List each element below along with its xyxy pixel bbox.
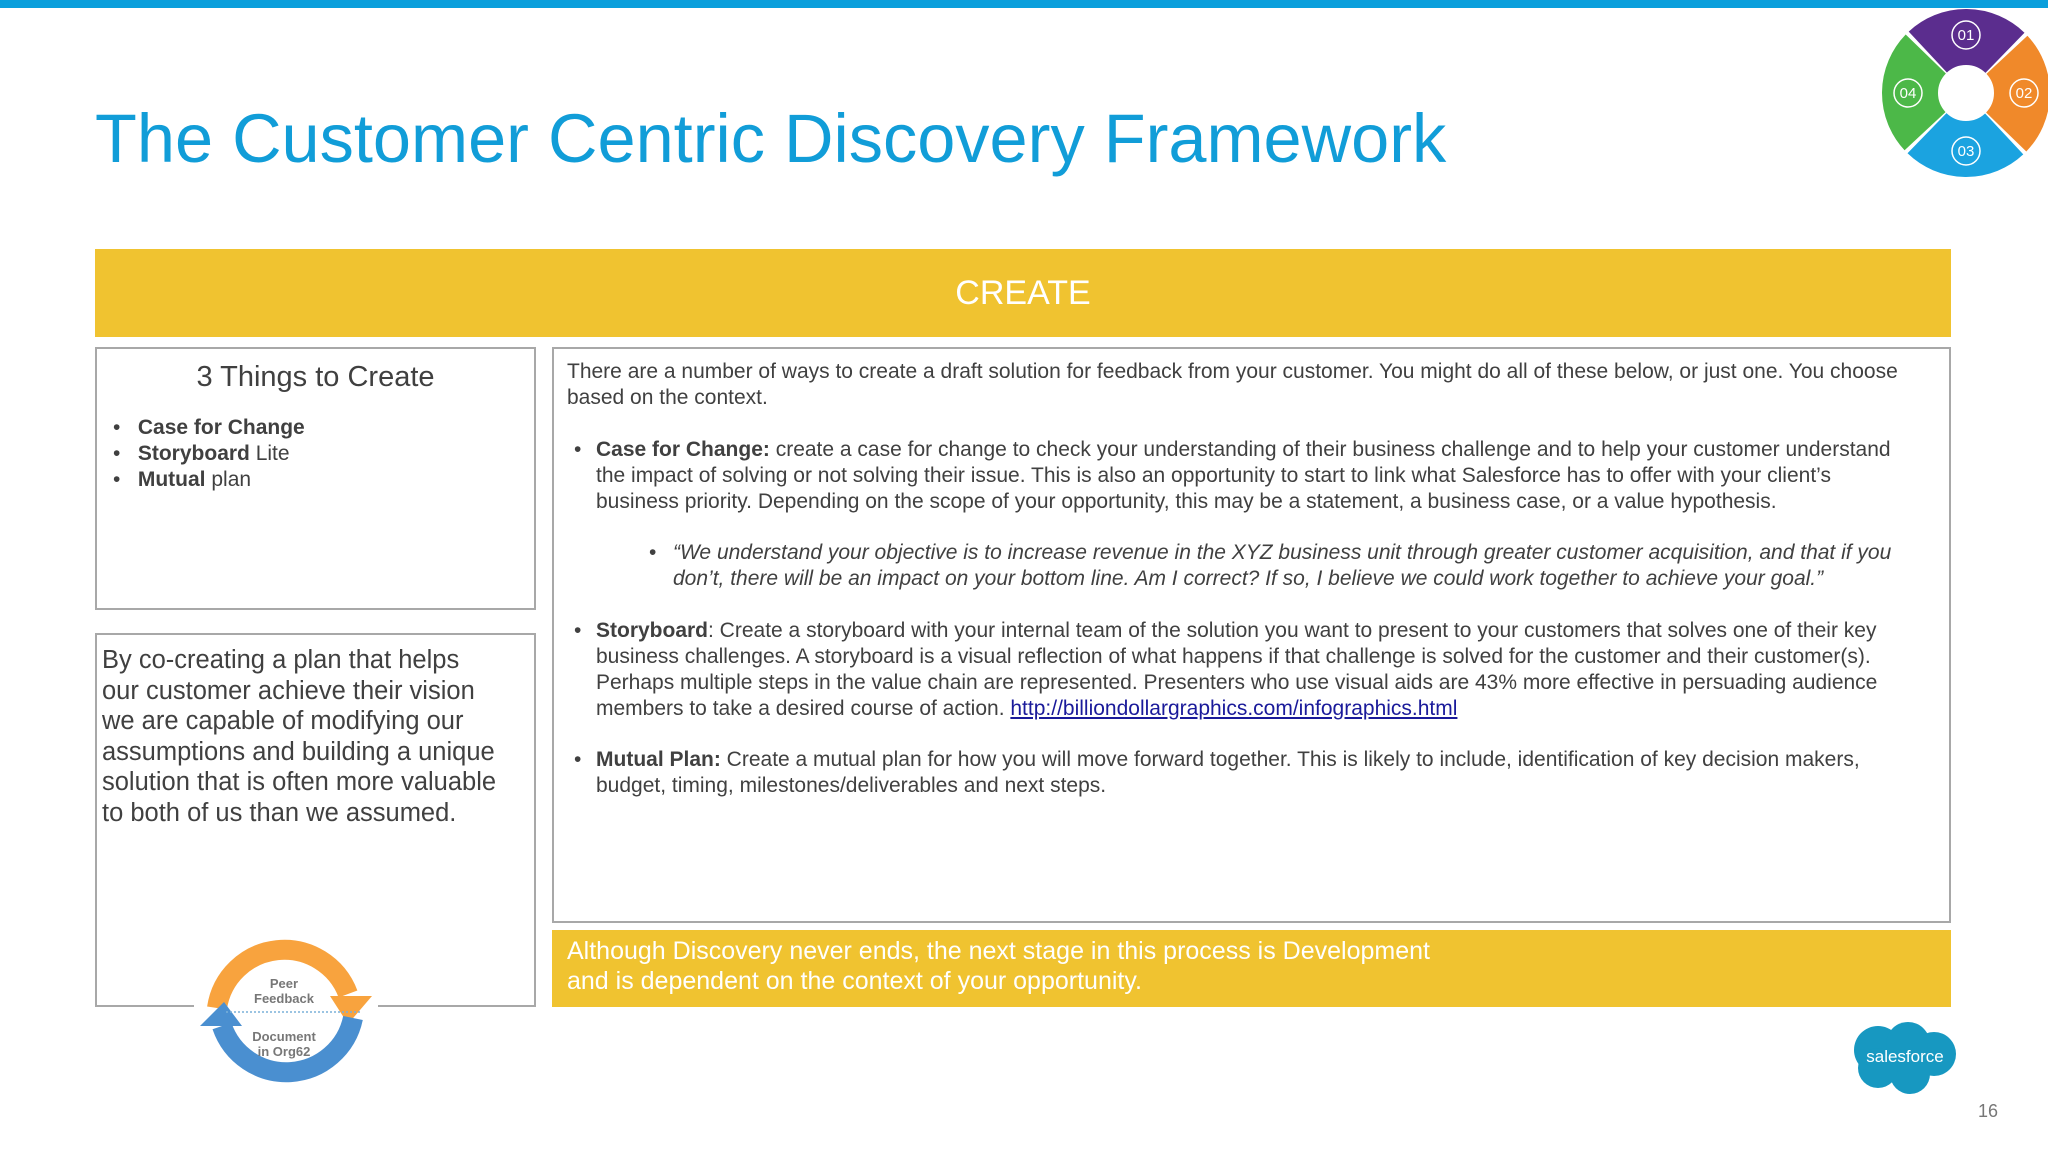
heading: 3 Things to Create [196,361,435,393]
CREATE banner: CREATE [955,274,1091,312]
logo: four-step cycle: 04 [1900,85,1916,102]
mutual plan: Mutual Plan: Create a mutual plan for how you will move forward together. This is likely to include, identification of key decision makers, budget, timing, milestones/deliverables and next steps. [596,748,1860,797]
quote: “We understand your objective is to increase revenue in the XYZ business unit through greater customer acquisition, and that if you don’t, there will be an impact on your bottom line. Am I correct? If so, I believe we could work together to achieve your goal.” [673,541,1891,590]
icon: peer feedback cycle: Peer [270,976,298,991]
top bar [0,0,2048,8]
icon: peer feedback cycle: Feedback [254,991,315,1006]
panel: co-creating statement: By co-creating a plan that helps our customer achieve their vision we are capable of modifying our assumptions and building a unique solution that is often more valuable to both of us than we assumed. [102,646,496,826]
bullet list [113,416,305,491]
logo: four-step cycle: 02 [2016,85,2032,102]
callout: next stage: Although Discovery never ends, the next stage in this process is Development [567,937,1430,965]
title: The Customer Centric Discovery Framework [95,100,1446,177]
bullet list: • Case for Change [113,416,305,439]
logo: four-step cycle: 03 [1958,143,1974,160]
logo: four-step cycle [1882,9,2048,177]
panel: ways to create draft solution [552,347,1951,923]
icon: peer feedback cycle [194,940,378,1082]
icon: peer feedback cycle: in Org62 [258,1044,310,1059]
bullet list: • Mutual plan [113,468,251,491]
intro text: There are a number of ways to create a draft solution for feedback from your customer. You might do all of these below, or just one. You choose based on the context. [567,360,1898,409]
storyboard: Storyboard: Create a storyboard with your internal team of the solution you want to present to your customers that solves one of their key business challenges. A storyboard is a visual reflection of what happens if that challenge is solved for the customer and their customer(s). Perhaps multiple steps in the value chain are represented. Presenters who use visual aids are 43% more effective in persuading audience members to take a desired course of action. http://billiondollargraphics.com/infographics.html [596,618,1877,720]
icon: salesforce cloud: salesforce [1866,1047,1944,1066]
icon: peer feedback cycle: Document [252,1029,316,1044]
page number: 16 [1978,1101,1998,1121]
CREATE banner [95,249,1951,337]
bullet list: • Storyboard Lite [113,442,290,465]
callout: next stage [552,930,1951,1007]
icon: salesforce cloud [1854,1022,1956,1094]
panel: co-creating statement [95,633,536,1007]
panel: 3 things to create [95,347,536,610]
logo: four-step cycle: 01 [1958,27,1974,44]
callout: next stage: and is dependent on the context of your opportunity. [567,967,1142,995]
case for change: Case for Change: create a case for change to check your understanding of their business challenge and to help your customer understand the impact of solving or not solving their issue. This is also an opportunity to start to link what Salesforce has to offer with your client’s business priority. Depending on the scope of your opportunity, this may be a statement, a business case, or a value hypothesis. [596,438,1891,512]
